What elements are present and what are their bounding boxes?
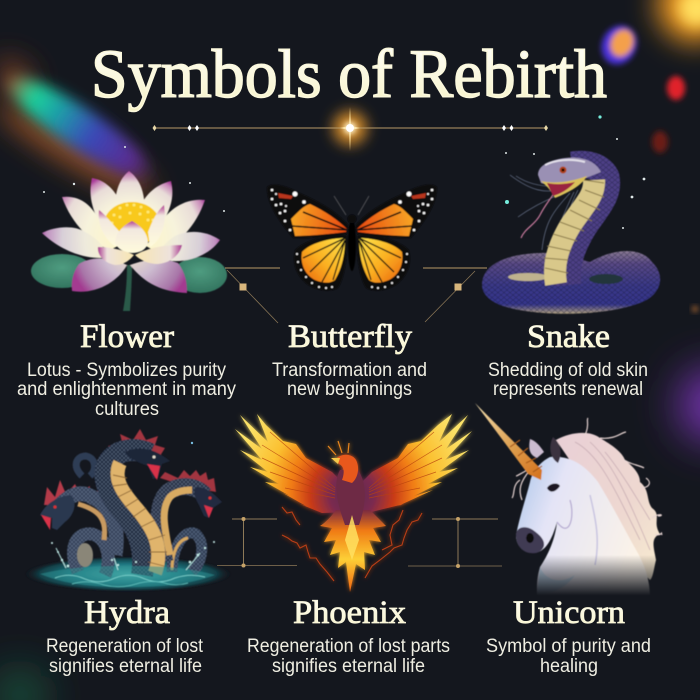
label: Phoenix: signifies eternal life: [272, 656, 425, 677]
label: Butterfly: Butterfly: [288, 319, 413, 355]
water glow: [24, 556, 232, 592]
label: Unicorn: healing: [540, 656, 598, 677]
label: Snake: [488, 319, 648, 400]
unicorn lower fade: [525, 555, 665, 600]
label: Flower: and enlightenment in many: [17, 379, 236, 400]
label: Flower: cultures: [95, 399, 159, 420]
label: Butterfly: new beginnings: [287, 379, 412, 400]
whiskers and tongue: [510, 175, 582, 250]
label: Butterfly: [272, 319, 427, 400]
head: [335, 455, 358, 483]
title: Symbols of Rebirth: [91, 36, 607, 112]
title divider with star: [152, 107, 548, 151]
right neck: [160, 470, 216, 492]
icon: snake: [482, 158, 660, 314]
label: Flower: Flower: [80, 319, 174, 355]
body: [516, 457, 650, 598]
water surface: [40, 566, 215, 587]
label: Unicorn: Unicorn: [513, 595, 625, 631]
head: [538, 158, 601, 185]
horn: [475, 403, 542, 480]
right wing: [356, 414, 472, 513]
fire tendrils: [282, 507, 422, 581]
label: Hydra: [46, 595, 204, 677]
right wings: [355, 185, 437, 291]
label: Snake: represents renewal: [493, 379, 643, 400]
icon: lotus flower: [31, 171, 227, 311]
label: Snake: Shedding of old skin: [488, 360, 648, 381]
icon: hydra: [24, 429, 232, 592]
label: Snake: Snake: [527, 319, 610, 355]
icon: phoenix: [235, 414, 472, 592]
icon: butterfly: [267, 185, 437, 291]
label: Butterfly: Transformation and: [272, 360, 427, 381]
label: Unicorn: Symbol of purity and: [486, 636, 651, 657]
label: Hydra: signifies eternal life: [49, 656, 202, 677]
coil: [482, 251, 660, 314]
neck: [568, 164, 607, 285]
left wing: [235, 414, 348, 513]
label: Hydra: Hydra: [84, 595, 170, 631]
left neck: [44, 480, 100, 505]
ears: [529, 439, 544, 458]
connector lines, lower row: [217, 517, 502, 568]
label: Flower: [17, 319, 236, 420]
feather lines: [262, 432, 442, 498]
label: Phoenix: Phoenix: [293, 595, 407, 631]
center neck: [102, 429, 165, 463]
label: Hydra: Regeneration of lost: [46, 636, 204, 657]
label: Unicorn: [486, 595, 651, 677]
body: [336, 470, 365, 525]
label: Phoenix: [247, 595, 450, 677]
rear coils: [74, 534, 108, 575]
icon: unicorn: [475, 403, 662, 598]
tail: [320, 510, 386, 592]
label: Flower: Lotus - Symbolizes purity: [27, 360, 226, 381]
connector lines, upper row: [225, 268, 487, 392]
left wings: [267, 185, 349, 291]
mane: [556, 433, 660, 580]
label: Phoenix: Regeneration of lost parts: [247, 636, 450, 657]
